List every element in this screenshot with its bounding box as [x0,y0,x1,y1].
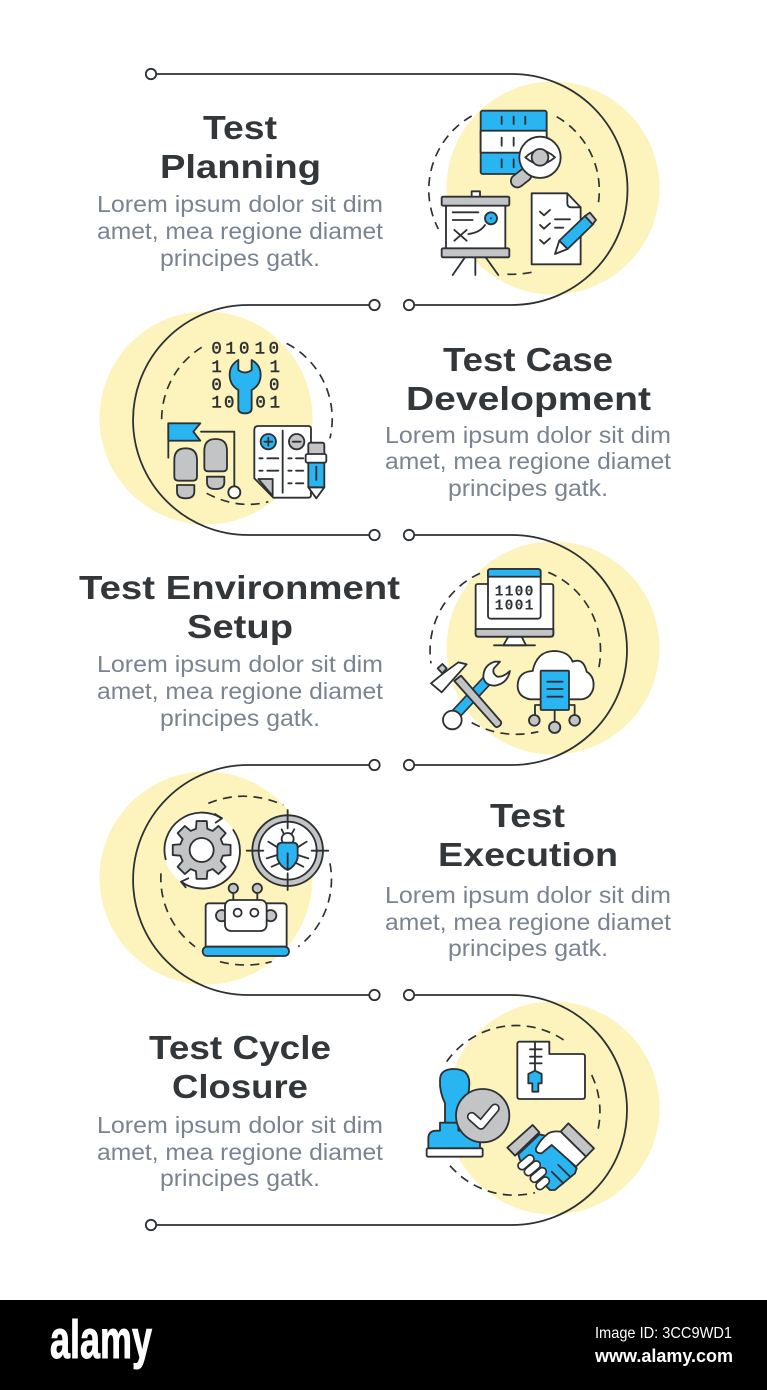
body text: test cycle closure: amet, mea regione diamet [97,1139,384,1165]
footer image id: Image ID: 3CC9WD1 [595,1325,732,1342]
footer logo: alamy [50,1310,152,1370]
heading: test case development: Development [406,380,651,417]
icon: pros and cons list with pen [254,426,326,498]
panel: test case development [162,341,672,504]
icon: checklist with pencil [532,193,596,264]
body text: test execution: amet, mea regione diamet [385,909,672,935]
body text: test environment setup: Lorem ipsum dolor sit dim [97,651,383,677]
heading: test execution: Test [490,797,565,834]
icon group: execution [161,796,331,965]
icon: handshake [507,1123,594,1190]
body text: test planning: principes gatk. [160,245,320,271]
body text: test planning: amet, mea regione diamet [97,218,384,244]
body text: test execution: principes gatk. [448,935,608,961]
heading: test cycle closure: Closure [172,1068,308,1105]
body text: test planning: Lorem ipsum dolor sit dim [97,191,383,217]
icon group: planning [429,111,599,275]
icon: approval stamp [427,1069,509,1157]
timeline connector line [133,69,627,1230]
footer website: www.alamy.com [594,1346,733,1366]
panel: test cycle closure [97,1025,600,1195]
icon group: closure [427,1025,600,1195]
icon group: development [162,341,332,504]
icon: monitor with code window: 1100 [495,585,533,601]
panel: test environment setup [79,569,601,734]
heading: test planning: Planning [160,148,321,185]
heading: test case development: Test Case [443,341,613,378]
body text: test environment setup: amet, mea regione diamet [97,678,384,704]
icon: database with magnifier [481,111,561,181]
icon: cloud server [518,651,594,733]
panel: test planning [97,109,599,275]
icon: monitor with code window: 1001 [495,599,534,615]
icon: binary digits with wrench: 00 [211,377,279,396]
icon: binary digits with wrench: 01010 [211,341,279,360]
body text: test cycle closure: Lorem ipsum dolor sit dim [97,1112,383,1138]
body text: test case development: Lorem ipsum dolor sit dim [385,422,671,448]
icon: presentation board [442,191,509,275]
icon group: environment [430,569,601,734]
heading: test cycle closure: Test Cycle [149,1029,331,1066]
icon: binary digits with wrench: 11 [211,359,280,378]
footer bar [0,1300,767,1390]
icon: binary digits with wrench [211,341,280,414]
icon: monitor with code window [476,569,553,645]
heading: test environment setup: Test Environment [79,569,400,606]
heading: test execution: Execution [438,836,618,873]
heading: test environment setup: Setup [187,608,293,645]
body text: test case development: amet, mea regione diamet [385,448,672,474]
icon: bug in target [247,810,328,890]
icon: hammer and wrench [431,662,510,729]
heading: test planning: Test [203,109,277,146]
panel: test execution [161,796,672,965]
body text: test execution: Lorem ipsum dolor sit dim [385,882,671,908]
icon: gear with cycle arrows [164,812,240,889]
body text: test cycle closure: principes gatk. [160,1165,320,1191]
icon: binary digits with wrench: 1001 [211,395,280,414]
icon: flag with footsteps [168,423,240,498]
yellow background circles [100,82,660,1214]
body text: test environment setup: principes gatk. [160,705,320,731]
icon: robot on laptop [203,884,289,956]
icon: zipped folder [517,1042,585,1099]
body text: test case development: principes gatk. [448,475,608,501]
